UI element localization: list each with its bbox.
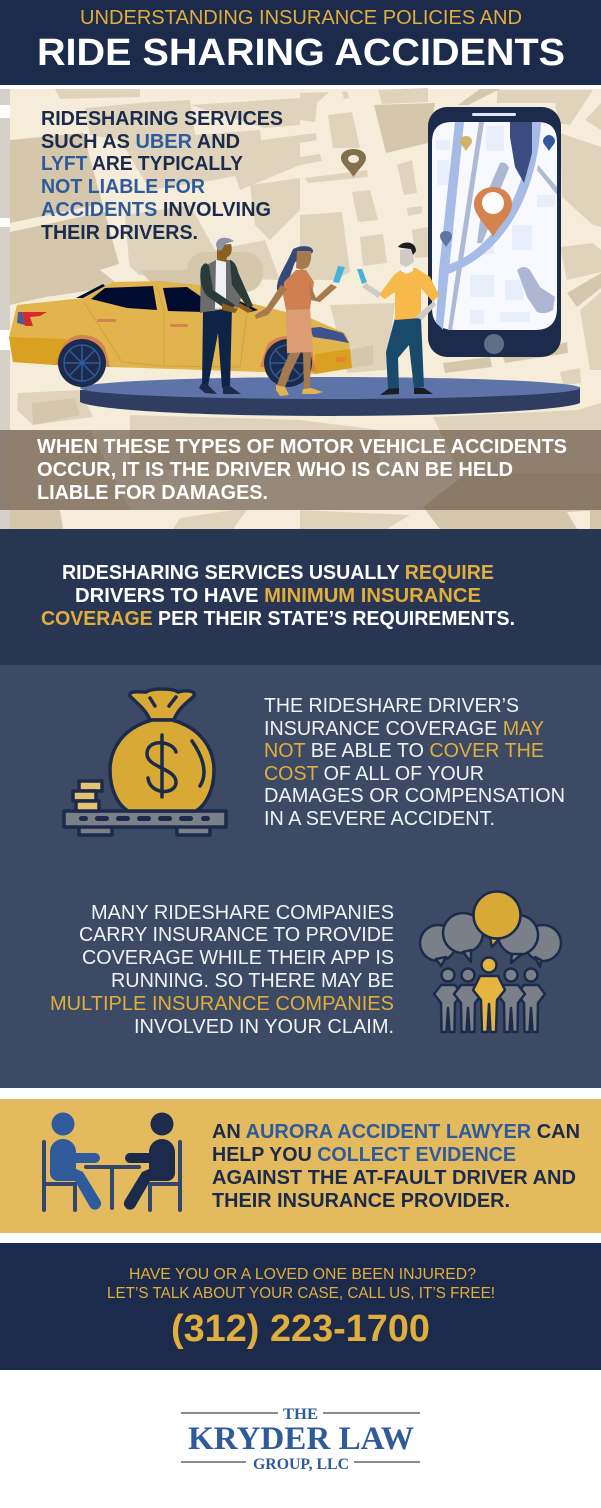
text block: lawyer can help: AGAINST THE AT-FAULT DRIVER AND [212, 1167, 576, 1189]
yellow car [9, 281, 352, 387]
heading text: SUCH AS UBER AND [41, 131, 240, 153]
header [0, 0, 601, 85]
text block: multiple insurers: RUNNING. SO THERE MAY BE [111, 970, 394, 992]
text block: coverage may not be enough: COST OF ALL OF YOUR [264, 763, 484, 785]
panel: call to action: HAVE YOU OR A LOVED ONE BEEN INJURED? [129, 1266, 476, 1283]
icon: crowd with speech bubbles [420, 892, 561, 1032]
text block: multiple insurers: COVERAGE WHILE THEIR APP IS [82, 947, 394, 969]
heading text: ACCIDENTS INVOLVING [41, 199, 271, 221]
caption band: OCCUR, IT IS THE DRIVER WHO IS CAN BE HELD [37, 459, 513, 481]
phone with map [428, 107, 561, 357]
text block: multiple insurers: CARRY INSURANCE TO PROVIDE [79, 924, 394, 946]
caption band: LIABLE FOR DAMAGES. [37, 482, 268, 504]
person: man in yellow sweater [357, 242, 439, 395]
heading text [41, 108, 283, 244]
text block: coverage may not be enough: INSURANCE COVERAGE MAY [264, 718, 544, 740]
caption band: WHEN THESE TYPES OF MOTOR VEHICLE ACCIDENTS [37, 436, 567, 458]
heading text: THEIR DRIVERS. [41, 222, 198, 244]
panel: call to action: (312) 223-1700 [171, 1308, 430, 1350]
panel: minimum coverage: DRIVERS TO HAVE MINIMUM INSURANCE [75, 585, 481, 607]
heading text: NOT LIABLE FOR [41, 176, 206, 198]
text block: multiple insurers [50, 902, 394, 1038]
person: woman in orange dress [255, 246, 345, 396]
text block: multiple insurers: MANY RIDESHARE COMPANIES [91, 902, 394, 924]
header: UNDERSTANDING INSURANCE POLICIES AND [80, 7, 522, 29]
logo [181, 1406, 420, 1473]
icon: map pin [341, 149, 366, 177]
panel: coverage details [0, 665, 601, 1088]
logo: THE [283, 1406, 318, 1423]
panel: minimum coverage [0, 529, 601, 665]
logo: GROUP, LLC [253, 1456, 349, 1473]
icon: money bag [64, 689, 226, 835]
caption band [0, 430, 601, 510]
text block: lawyer can help: HELP YOU COLLECT EVIDENCE [212, 1144, 516, 1166]
text block: multiple insurers: INVOLVED IN YOUR CLAIM. [134, 1016, 394, 1038]
text block: coverage may not be enough: DAMAGES OR COMPENSATION [264, 785, 565, 807]
panel: call to action [0, 1243, 601, 1370]
person: man in grey jacket [199, 238, 253, 394]
text block: coverage may not be enough [264, 695, 565, 830]
hero panel [0, 86, 601, 529]
text block: lawyer can help: THEIR INSURANCE PROVIDER. [212, 1190, 510, 1212]
text block: multiple insurers: MULTIPLE INSURANCE COMPANIES [50, 993, 394, 1015]
platform [80, 377, 580, 416]
panel: aurora accident lawyer [0, 1099, 601, 1233]
map background [0, 86, 601, 529]
panel: minimum coverage: RIDESHARING SERVICES USUALLY REQUIRE [62, 562, 494, 584]
text block: lawyer can help: AN AURORA ACCIDENT LAWYER CAN [212, 1121, 580, 1143]
logo: KRYDER LAW [188, 1421, 414, 1457]
text block: coverage may not be enough: IN A SEVERE ACCIDENT. [264, 808, 495, 830]
panel: minimum coverage: COVERAGE PER THEIR STATE’S REQUIREMENTS. [41, 608, 515, 630]
text block: lawyer can help [212, 1121, 580, 1212]
text block: coverage may not be enough: NOT BE ABLE TO COVER THE [264, 740, 544, 762]
panel: call to action: LET’S TALK ABOUT YOUR CASE, CALL US, IT’S FREE! [107, 1285, 495, 1302]
heading text: LYFT ARE TYPICALLY [41, 153, 244, 175]
icon: two people meeting at table [44, 1112, 180, 1210]
heading text: RIDESHARING SERVICES [41, 108, 283, 130]
header: RIDE SHARING ACCIDENTS [37, 32, 565, 74]
text block: coverage may not be enough: THE RIDESHARE DRIVER’S [264, 695, 519, 717]
